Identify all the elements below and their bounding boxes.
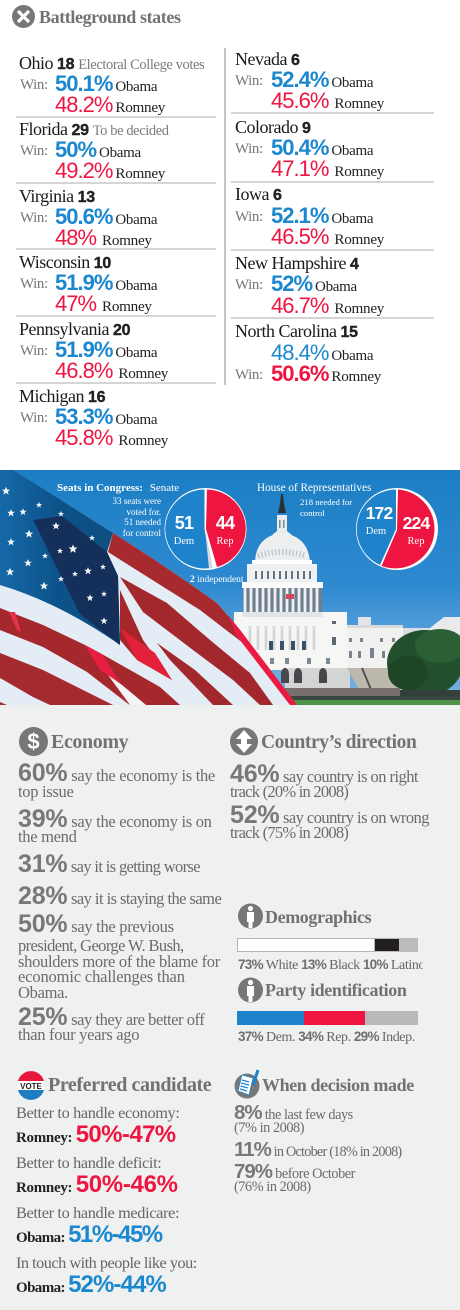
- state: New Hampshire: 46.7% Romney: [271, 293, 384, 318]
- pie chart: Senate: Dem: [174, 536, 194, 547]
- state: Colorado: Win:: [235, 141, 263, 157]
- heading: economy: Economy: [51, 731, 128, 753]
- stacked bar: demographics: [237, 938, 418, 952]
- state: New Hampshire: [235, 253, 384, 318]
- label: 2 independent: 2 independent: [190, 575, 244, 585]
- panel: party identification: [237, 978, 418, 1045]
- stacked bar: party identification: [237, 1011, 418, 1025]
- state: Wisconsin: 47% Romney: [55, 291, 152, 316]
- result: medicare: Obama: 51%-45%: [16, 1221, 162, 1248]
- pie chart: Senate: Rep: [217, 536, 233, 547]
- state: North Carolina: 48.4%Obama: [271, 340, 373, 365]
- pie chart: House of Representatives: 172: [366, 503, 393, 523]
- heading: House of Representatives: House of Representatives: [257, 482, 371, 494]
- stat: 79 percent: 79% before October: [234, 1160, 355, 1183]
- icon: dollar: $: [27, 729, 40, 754]
- state: Ohio: 50.1%Obama: [55, 71, 157, 96]
- icon: dollar: [19, 727, 48, 756]
- heading: when decision made: When decision made: [262, 1075, 414, 1095]
- text: wrong track 2008: track (75% in 2008): [230, 823, 348, 842]
- text: 76 percent in 2008: (76% in 2008): [234, 1179, 311, 1195]
- state: Iowa: 52.1%Obama: [271, 203, 373, 228]
- pie chart: House of Representatives: Rep: [408, 536, 424, 547]
- panel: battleground states right column: [231, 49, 434, 386]
- heading: country's direction: Country’s direction: [261, 732, 416, 753]
- stat: 52 percent: 52% say country is on wrong: [230, 801, 429, 829]
- icon: notepad and pen: [234, 1069, 264, 1099]
- icon: vote badge: [18, 1071, 44, 1100]
- state: Virginia: [19, 186, 158, 250]
- note: Senate control: for control: [123, 528, 161, 538]
- state: Ohio: 48.2%Romney: [55, 92, 165, 117]
- state: Michigan: Win:: [20, 410, 48, 426]
- state: Pennsylvania: Win:: [20, 343, 48, 359]
- state: Florida: 49.2%Romney: [55, 158, 165, 183]
- state: North Carolina: 50.6%Romney: [271, 361, 381, 386]
- result: in touch: Obama: 52%-44%: [16, 1271, 166, 1298]
- label: party values: 37% Dem. 34% Rep. 29% Indep.: [238, 1029, 415, 1045]
- state: Florida: Win:: [20, 143, 48, 159]
- stat: 50 percent blame: Obama.: [18, 983, 68, 1002]
- state: North Carolina: [235, 321, 382, 386]
- state: Colorado: 47.1% Romney: [271, 156, 384, 181]
- pie chart: House of Representatives: Dem: [366, 526, 386, 537]
- stat: 25 percent: 25% say they are better off: [18, 1003, 204, 1031]
- result: economy: Romney: 50%-47%: [16, 1121, 176, 1148]
- state: Colorado: Colorado 9: [235, 117, 311, 137]
- state: Virginia: Virginia 13: [19, 186, 95, 206]
- text: in touch with people: In touch with people like you:: [16, 1253, 197, 1272]
- state: Wisconsin: [19, 252, 158, 316]
- state: New Hampshire: Win:: [235, 277, 263, 293]
- text: 7 percent in 2008: (7% in 2008): [234, 1120, 304, 1136]
- heading: battleground states: Battleground states: [39, 7, 181, 27]
- stat: 28 percent: 28% say it is staying the same: [18, 882, 221, 910]
- tree: [387, 629, 460, 698]
- stat: 31 percent: 31% say it is getting worse: [18, 850, 200, 878]
- state: Colorado: [235, 117, 384, 181]
- panel: preferred candidate: [16, 1071, 212, 1298]
- state: Florida: Florida 29 To be decided: [19, 119, 169, 139]
- state: North Carolina: Win:: [235, 367, 263, 383]
- icon: up and down arrows: [230, 728, 258, 756]
- icon: person: [238, 904, 263, 928]
- icon: vote badge: VOTE: [20, 1082, 43, 1091]
- note: House control: control: [300, 508, 325, 518]
- panel: when decision made: [234, 1070, 414, 1195]
- state: Nevada: 52.4%Obama: [271, 67, 373, 92]
- state: Ohio: [19, 53, 204, 117]
- state: Nevada: [235, 49, 384, 113]
- state: Pennsylvania: 51.9%Obama: [55, 337, 157, 362]
- stat: 8 percent: 8% the last few days: [234, 1101, 353, 1124]
- note: Senate control: 33 seats were: [113, 496, 161, 506]
- stars: [2, 487, 108, 624]
- state: Florida: [19, 119, 169, 183]
- state: New Hampshire: New Hampshire 4: [235, 253, 359, 273]
- pie chart: House of Representatives: [356, 488, 438, 570]
- state: Michigan: Michigan 16: [19, 386, 105, 406]
- pie chart: Senate: [164, 488, 246, 570]
- state: Nevada: 45.6% Romney: [271, 88, 384, 113]
- capitol building: [234, 494, 460, 697]
- state: Michigan: 45.8% Romney: [55, 425, 168, 450]
- state: Colorado: 50.4%Obama: [271, 135, 373, 160]
- text: than four years ago: than four years ago: [18, 1025, 139, 1044]
- state: Nevada: Win:: [235, 73, 263, 89]
- lawn: [280, 696, 460, 705]
- text: better to handle economy: Better to handle economy:: [16, 1103, 180, 1122]
- state: Nevada: Nevada 6: [235, 49, 300, 69]
- panel: photo banner with Congress seats: [0, 470, 460, 705]
- state: Virginia: 50.6%Obama: [55, 204, 157, 229]
- state: Iowa: Iowa 6: [235, 184, 282, 204]
- stat: 39 percent: 39% say the economy is on: [18, 805, 212, 833]
- state: North Carolina: North Carolina 15: [235, 321, 358, 341]
- state: New Hampshire: 52%Obama: [271, 271, 357, 296]
- state: Michigan: 53.3%Obama: [55, 404, 157, 429]
- state: Iowa: 46.5% Romney: [271, 224, 384, 249]
- American flag: [0, 470, 297, 705]
- state: Florida: 50%Obama: [55, 137, 141, 162]
- stat: 50 percent blame: [18, 910, 220, 1002]
- stat: 50 percent blame: shoulders more of the blame for: [18, 952, 220, 971]
- stat: 60 percent: 60% say the economy is the: [18, 759, 215, 787]
- icon: battleground cross: [12, 5, 35, 28]
- panel: country's direction: [230, 728, 430, 842]
- icon: person: [238, 978, 263, 1002]
- state: Pennsylvania: 46.8% Romney: [55, 358, 168, 383]
- state: Iowa: Win:: [235, 209, 263, 225]
- stat: 11 percent: 11% in October (18% in 2008): [234, 1138, 401, 1161]
- state: Virginia: Win:: [20, 210, 48, 226]
- state: Wisconsin: Win:: [20, 276, 48, 292]
- heading: seats in Congress, Senate: Seats in Congress: Senate: [57, 482, 179, 494]
- state: Iowa: [235, 184, 384, 249]
- note: Senate control: voted for.: [126, 507, 161, 517]
- panel: economy: [18, 727, 222, 1044]
- stat: 50 percent blame: economic challenges than: [18, 967, 185, 986]
- state: Pennsylvania: Pennsylvania 20: [19, 319, 130, 339]
- state: Virginia: 48% Romney: [55, 225, 152, 250]
- state: Wisconsin: Wisconsin 10: [19, 252, 111, 272]
- panel: demographics: [237, 904, 423, 973]
- stat: 46 percent: 46% say country is on right: [230, 760, 418, 788]
- state: Ohio: Win:: [20, 77, 48, 93]
- text: the mend: the mend: [18, 827, 77, 846]
- state: Pennsylvania: [19, 319, 168, 383]
- pie chart: Senate: 51: [175, 513, 194, 533]
- heading: preferred candidate: Preferred candidate: [48, 1074, 211, 1096]
- panel: battleground states left column: [16, 53, 216, 450]
- pie chart: House of Representatives: 224: [403, 513, 430, 533]
- state: Ohio: Ohio 18 Electoral College votes: [19, 53, 204, 73]
- heading: demographics: Demographics: [265, 907, 371, 927]
- note: Senate control: 51 needed: [124, 517, 161, 527]
- state: Wisconsin: 51.9%Obama: [55, 270, 157, 295]
- text: right track 2008: track (20% in 2008): [230, 782, 348, 801]
- label: demographics values: 73% White 13% Black 10% Latino: [238, 957, 423, 973]
- state: Michigan: [19, 386, 168, 450]
- pie chart: Senate: 44: [216, 513, 235, 533]
- text: better to handle deficit: Better to handle deficit:: [16, 1153, 161, 1172]
- panel: grey statistics background: [0, 705, 460, 1310]
- heading: party identification: Party identification: [265, 980, 406, 1000]
- result: deficit: Romney: 50%-46%: [16, 1171, 178, 1198]
- canton: [0, 470, 120, 645]
- text: top issue: top issue: [18, 782, 74, 801]
- stat: 50 percent blame: 50% say the previous: [18, 910, 174, 938]
- note: House control: 218 needed for: [300, 497, 352, 507]
- stat: 50 percent blame: president, George W. Bush,: [18, 936, 184, 955]
- column divider: [224, 48, 226, 385]
- text: better to handle medicare: Better to handle medicare:: [16, 1203, 179, 1222]
